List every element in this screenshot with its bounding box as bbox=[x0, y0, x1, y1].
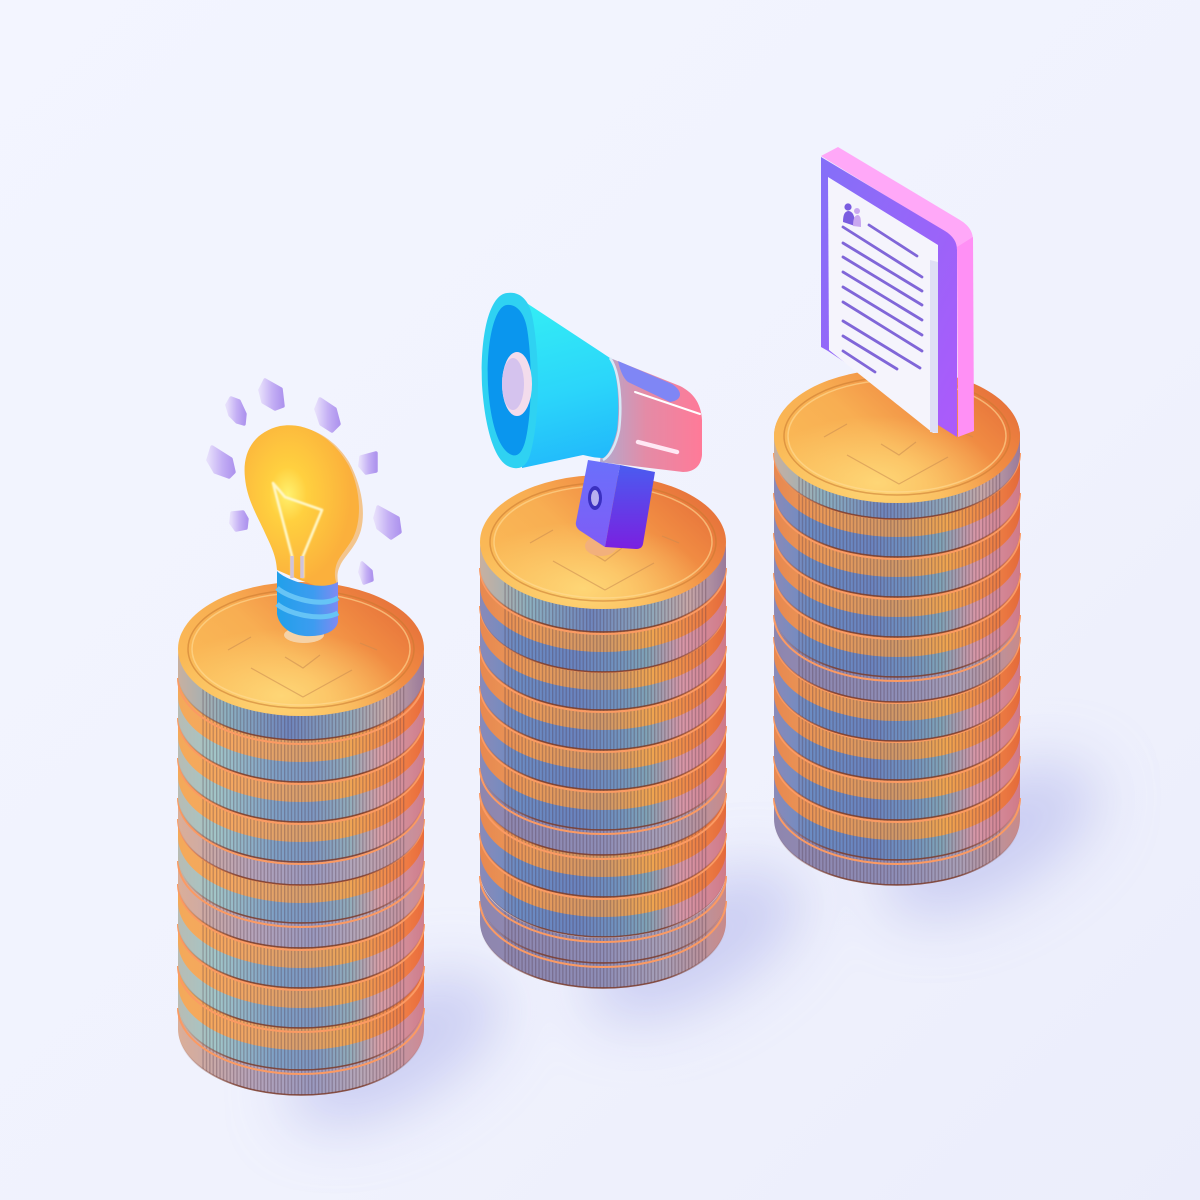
filament stems bbox=[292, 556, 302, 578]
handle button cap bbox=[591, 490, 599, 506]
paper sheet bbox=[828, 177, 938, 433]
doc right edge bbox=[957, 237, 974, 437]
bulb glass bbox=[245, 425, 359, 590]
handle button bbox=[588, 486, 602, 510]
mouth outer rim bbox=[482, 293, 538, 468]
icon: megaphone bbox=[482, 293, 702, 556]
purple patch bbox=[618, 361, 680, 402]
doc purple cover bbox=[821, 157, 957, 437]
bulb glass back edge bbox=[282, 426, 363, 586]
cone bbox=[522, 300, 618, 468]
handle left face bbox=[576, 460, 620, 547]
doc top edge bbox=[821, 147, 973, 248]
screw threads bbox=[277, 588, 338, 617]
speaker dome bbox=[502, 358, 524, 410]
text lines on paper bbox=[843, 225, 922, 372]
filament bbox=[273, 483, 322, 578]
stack 3: coins bbox=[774, 369, 1020, 885]
body highlights bbox=[635, 392, 700, 414]
icon: light bulb bbox=[208, 380, 400, 643]
screw base cream foot bbox=[284, 627, 324, 643]
body lower highlight bbox=[638, 442, 677, 452]
paper edge bbox=[930, 260, 938, 433]
icon: document bbox=[821, 147, 974, 437]
ground shadows bbox=[264, 732, 1121, 1158]
screw base bbox=[277, 571, 338, 636]
handle foot bbox=[585, 536, 617, 556]
collar ring bbox=[603, 358, 620, 460]
illustration: three coin stacks with icons bbox=[177, 147, 1123, 1152]
people icon bbox=[843, 203, 861, 227]
stack 1: coins bbox=[178, 582, 424, 1095]
megaphone rear body bbox=[600, 358, 702, 472]
sparks around bulb bbox=[208, 380, 400, 583]
stack 2: coins bbox=[480, 475, 726, 988]
handle right face bbox=[605, 465, 655, 549]
speaker ring bbox=[502, 352, 532, 416]
mouth inner bbox=[488, 305, 531, 455]
